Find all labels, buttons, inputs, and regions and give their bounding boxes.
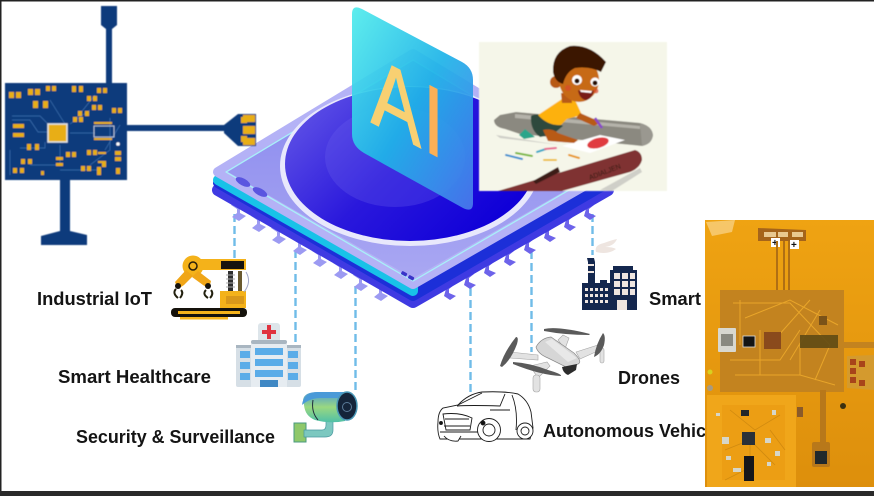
PCB components [9, 86, 255, 175]
board chips [743, 336, 755, 347]
paper drawing [562, 135, 625, 153]
USB connector [718, 328, 736, 352]
chip base layers [218, 54, 608, 302]
central AI chip [218, 54, 608, 302]
label: Smart: Smart [649, 289, 701, 309]
chip surface marks [234, 175, 415, 281]
icon: car outline [438, 392, 533, 442]
child on crayon picture [479, 42, 667, 191]
flexible PCB, blue [5, 6, 256, 245]
lower board chips [742, 432, 755, 445]
lower stem and pad [820, 390, 826, 445]
pen engraved name: ADIALJEN [588, 163, 622, 182]
PCB traces [10, 95, 120, 175]
sensor tab [758, 228, 806, 241]
upper board [720, 290, 874, 392]
chip pins [231, 200, 596, 301]
chip round socket [280, 86, 540, 246]
icon: security camera [294, 392, 357, 442]
label: Drones: Drones [618, 368, 680, 388]
label: Industrial IoT: Industrial IoT [37, 289, 152, 309]
right connector [847, 355, 874, 390]
label: Autonomous Vehicles: Autonomous Vehic [543, 421, 706, 441]
icon: smart factory [582, 239, 637, 310]
label: Security & Surveillance: Security & Surveillance [76, 427, 275, 447]
AI lettering: AI [371, 35, 444, 181]
icon: drone [500, 328, 605, 392]
flexible PCB photo, orange: + [791, 240, 797, 251]
label: Smart Healthcare: Smart Healthcare [58, 367, 211, 387]
plus marks: + [772, 238, 778, 249]
dashed connector lines [234, 214, 592, 392]
AI glass card [352, 7, 473, 210]
icon: hospital [236, 323, 301, 387]
icon: industrial robot [171, 256, 249, 320]
pen shadow [496, 135, 642, 191]
crayons [506, 148, 579, 160]
boy [519, 46, 606, 143]
maroon pen [498, 150, 642, 191]
lower board [707, 395, 796, 487]
flexible PCB photo, orange [705, 220, 874, 487]
grey pen [494, 112, 653, 146]
